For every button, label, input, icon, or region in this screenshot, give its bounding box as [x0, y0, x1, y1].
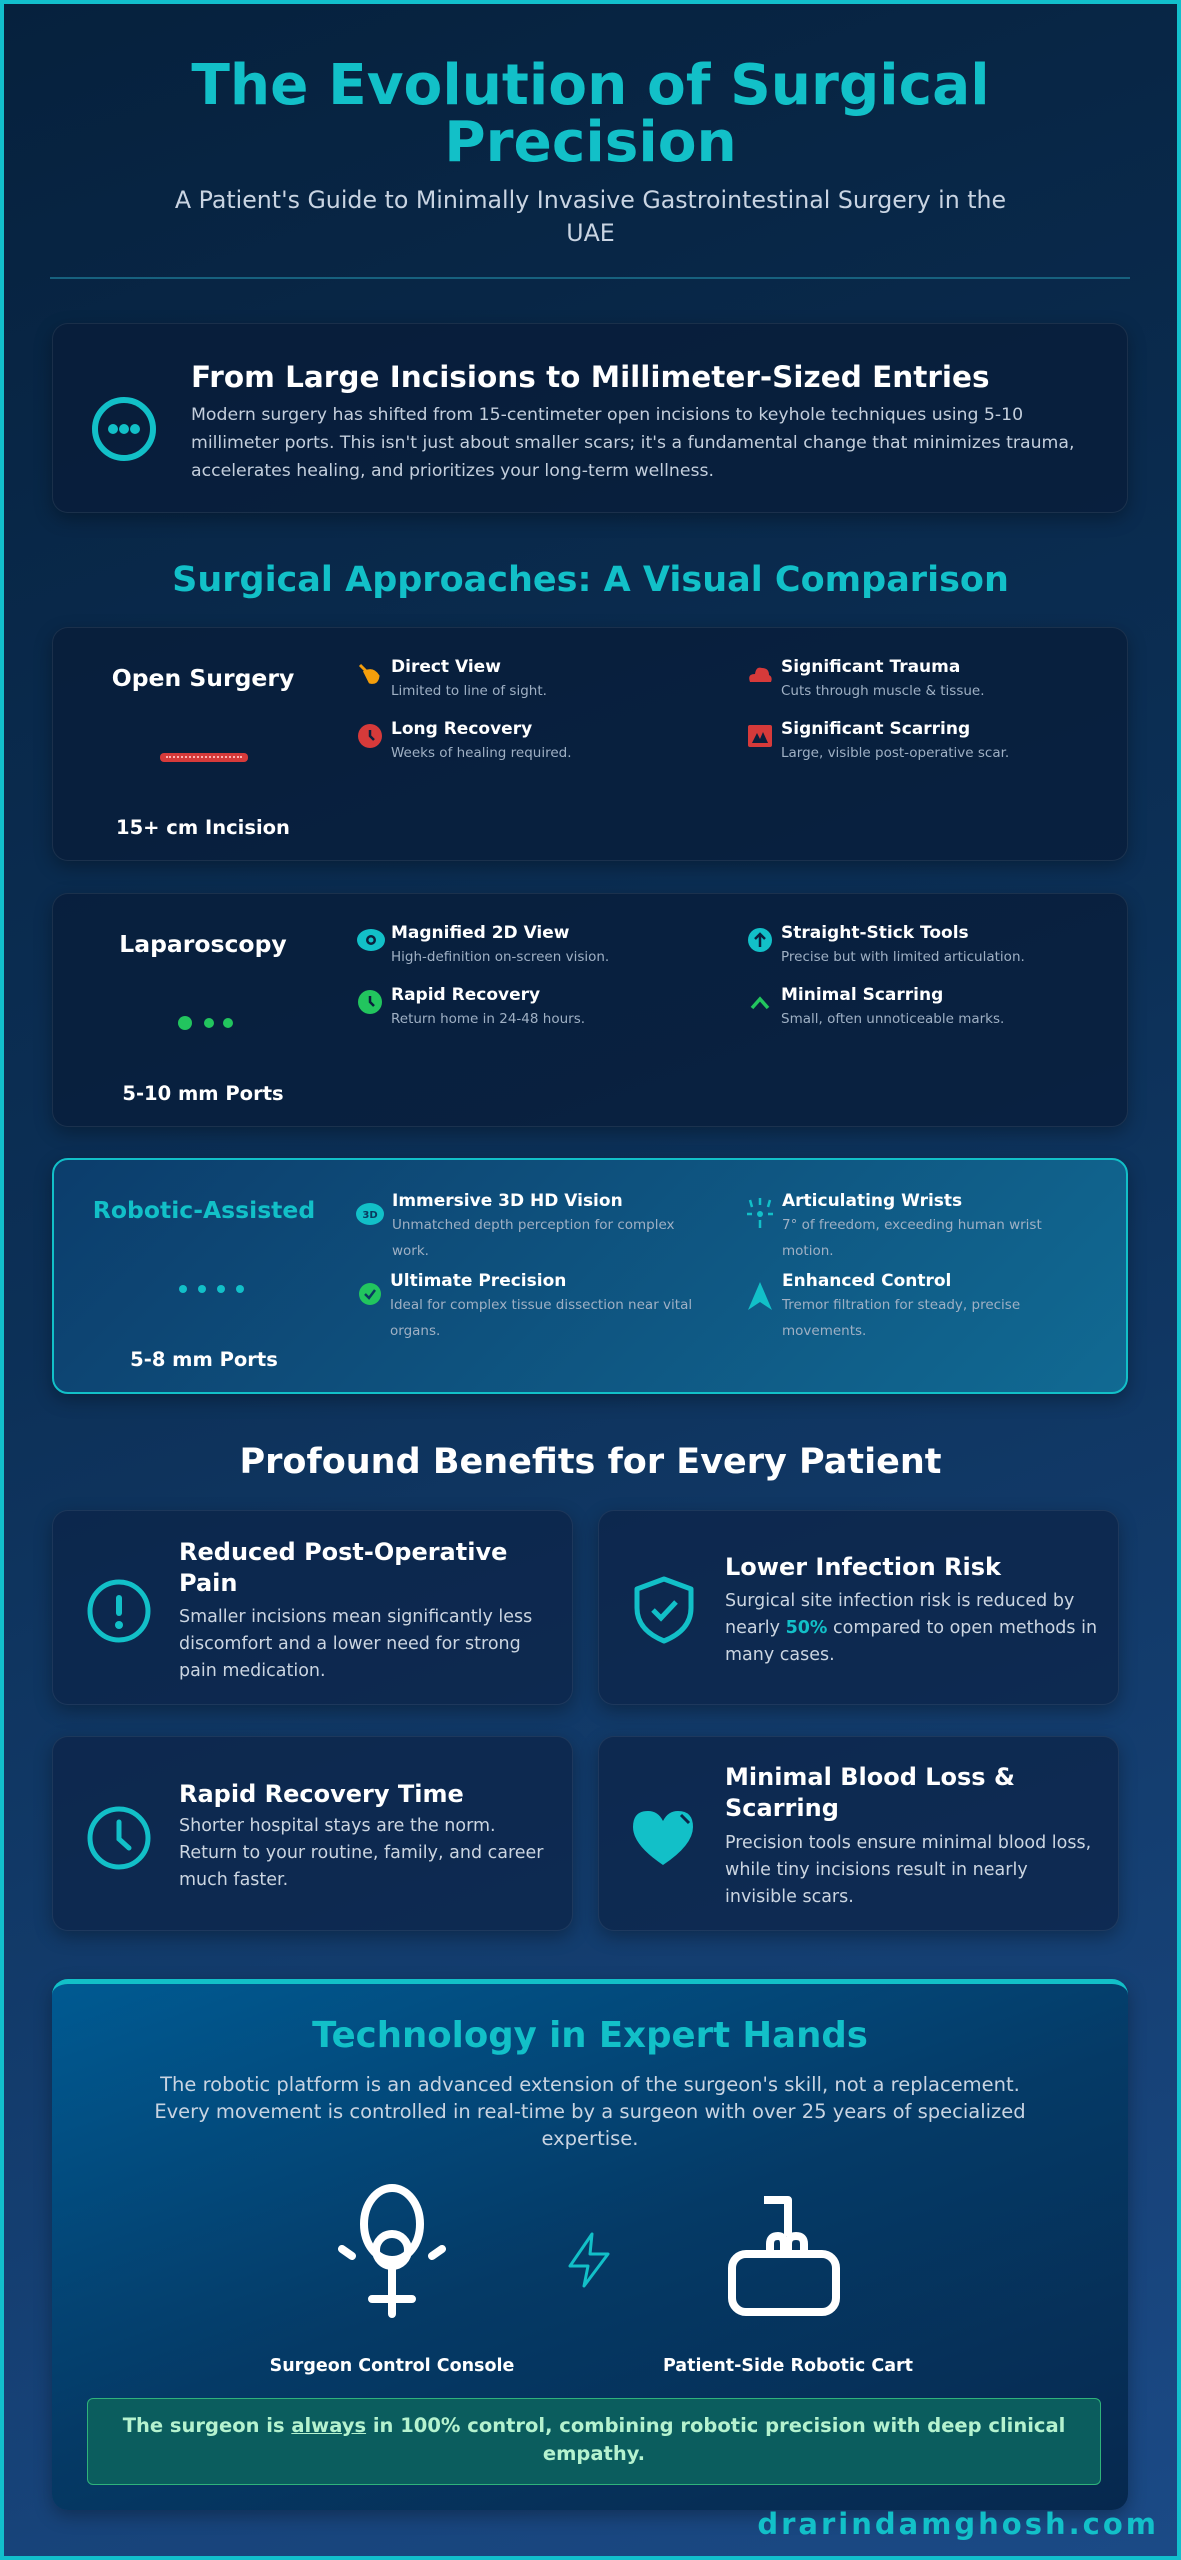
feature: straight tools: Straight-Stick Tools	[781, 923, 969, 943]
feature: significant scarring: Significant Scarring	[781, 719, 970, 739]
benefit: rapid recovery	[52, 1736, 573, 1931]
heading: benefits: Profound Benefits for Every Patient	[240, 1442, 941, 1482]
panel: intro	[52, 323, 1128, 513]
feature: straight tools	[748, 923, 1025, 965]
ports dots	[179, 1285, 244, 1293]
intro text: Modern surgery has shifted from 15-centimeter open incisions to keyhole techniques using 5-10 millimeter ports. This isn't just about smaller scars; it's a fundamental change that minimizes trauma, accelerates healing, and prioritizes your long-term wellness.	[191, 405, 1074, 481]
benefit: reduced pain: Reduced Post-Operative	[179, 1538, 507, 1566]
feature: rapid recovery: Return home in 24-48 hours.	[391, 1011, 585, 1027]
feature: rapid recovery	[358, 985, 585, 1027]
feature: articulating wrists: 7° of freedom, exceeding human wrist motion.	[782, 1217, 1042, 1259]
benefit: reduced pain: Pain	[179, 1569, 237, 1597]
feature: 3d vision: Unmatched depth perception for complex work.	[392, 1217, 675, 1259]
title: The Evolution of Surgical	[191, 53, 990, 118]
feature: articulating wrists: Articulating Wrists	[782, 1191, 962, 1211]
benefit: reduced pain: Smaller incisions mean significantly less discomfort and a lower need for strong pain medication.	[179, 1607, 532, 1681]
ports dots	[178, 1016, 233, 1030]
panel: robotic	[52, 1158, 1128, 1394]
feature: long recovery	[358, 719, 572, 761]
feature: significant scarring	[748, 719, 1009, 761]
feature: 3d vision: Immersive 3D HD Vision	[392, 1191, 623, 1211]
feature: magnified view: Magnified 2D View	[391, 923, 569, 943]
feature: rapid recovery: Rapid Recovery	[391, 985, 540, 1005]
feature: magnified view: High-definition on-screen vision.	[391, 949, 609, 965]
label: cart: Patient-Side Robotic Cart	[663, 2356, 913, 2376]
panel: laparoscopy	[52, 893, 1128, 1127]
intro heading: From Large Incisions to Millimeter-Sized Entries	[191, 360, 990, 394]
feature: minimal scarring	[750, 985, 1004, 1027]
label: console: Surgeon Control Console	[270, 2356, 514, 2376]
icon: lightning	[568, 2232, 610, 2288]
icon: dots circle	[92, 397, 156, 461]
feature: enhanced control	[748, 1271, 1020, 1339]
tech title: Technology in Expert Hands	[312, 2015, 868, 2056]
feature: ultimate precision: Ideal for complex tissue dissection near vital organs.	[390, 1297, 692, 1339]
feature: enhanced control: Enhanced Control	[782, 1271, 951, 1291]
feature: 3d vision	[356, 1191, 675, 1259]
feature: minimal scarring: Minimal Scarring	[781, 985, 943, 1005]
feature: significant trauma: Cuts through muscle & tissue.	[781, 683, 985, 699]
feature: straight tools: Precise but with limited articulation.	[781, 949, 1025, 965]
title	[191, 53, 990, 175]
feature: direct view: Direct View	[391, 657, 501, 677]
benefit: rapid recovery: Shorter hospital stays are the norm. Return to your routine, family, and career much faster.	[179, 1816, 544, 1890]
benefit: blood loss: Precision tools ensure minimal blood loss, while tiny incisions result in nearly invisible scars.	[725, 1833, 1091, 1907]
feature: direct view	[359, 657, 547, 699]
feature: 3d vision: 3D	[362, 1210, 378, 1221]
tech text: The robotic platform is an advanced extension of the surgeon's skill, not a replacement. Every movement is controlled in real-time by a surgeon with over 25 years of specialized expertise.	[154, 2073, 1026, 2150]
panel: robotic: Robotic-Assisted	[93, 1196, 315, 1224]
panel: open surgery: 15+ cm Incision	[116, 816, 290, 839]
feature: significant trauma	[749, 657, 985, 699]
footer: drarindamghosh.com	[757, 2507, 1159, 2541]
feature: long recovery: Long Recovery	[391, 719, 532, 739]
feature: direct view: Limited to line of sight.	[391, 683, 547, 699]
feature: enhanced control: Tremor filtration for steady, precise movements.	[782, 1297, 1020, 1339]
incision	[160, 753, 248, 762]
benefit: blood loss	[598, 1736, 1119, 1931]
icon: surgeon console	[338, 2184, 446, 2318]
callout: control	[87, 2398, 1101, 2485]
benefit: infection risk: Lower Infection Risk	[725, 1553, 1001, 1581]
title: Precision	[444, 110, 737, 175]
feature: articulating wrists	[747, 1191, 1042, 1259]
benefit: blood loss: Scarring	[725, 1794, 839, 1822]
benefit: infection risk	[598, 1510, 1119, 1705]
panel: laparoscopy: Laparoscopy	[119, 930, 287, 958]
feature: significant scarring: Large, visible post-operative scar.	[781, 745, 1009, 761]
feature: ultimate precision: Ultimate Precision	[390, 1271, 566, 1291]
icon: robotic cart	[728, 2196, 840, 2316]
feature: ultimate precision	[359, 1271, 692, 1339]
benefit: rapid recovery: Rapid Recovery Time	[179, 1780, 464, 1808]
feature: minimal scarring: Small, often unnoticeable marks.	[781, 1011, 1004, 1027]
benefit: infection risk: Surgical site infection risk is reduced by nearly 50% compared to open methods in many cases.	[725, 1591, 1097, 1665]
feature: long recovery: Weeks of healing required.	[391, 745, 572, 761]
panel: robotic: 5-8 mm Ports	[130, 1348, 278, 1371]
feature: significant trauma: Significant Trauma	[781, 657, 960, 677]
benefit: blood loss: Minimal Blood Loss &	[725, 1763, 1015, 1791]
panel: open surgery	[52, 627, 1128, 861]
callout: control: The surgeon is always in 100% control, combining robotic precision with deep clinical empathy.	[123, 2414, 1065, 2465]
heading: approaches: Surgical Approaches: A Visual Comparison	[172, 560, 1009, 600]
feature: magnified view	[357, 923, 609, 965]
label: Open Surgery	[112, 664, 294, 692]
panel: laparoscopy: 5-10 mm Ports	[122, 1082, 284, 1105]
subtitle: A Patient's Guide to Minimally Invasive Gastrointestinal Surgery in the UAE	[175, 186, 1006, 247]
benefit: reduced pain	[52, 1510, 573, 1705]
panel: technology	[52, 1979, 1128, 2510]
